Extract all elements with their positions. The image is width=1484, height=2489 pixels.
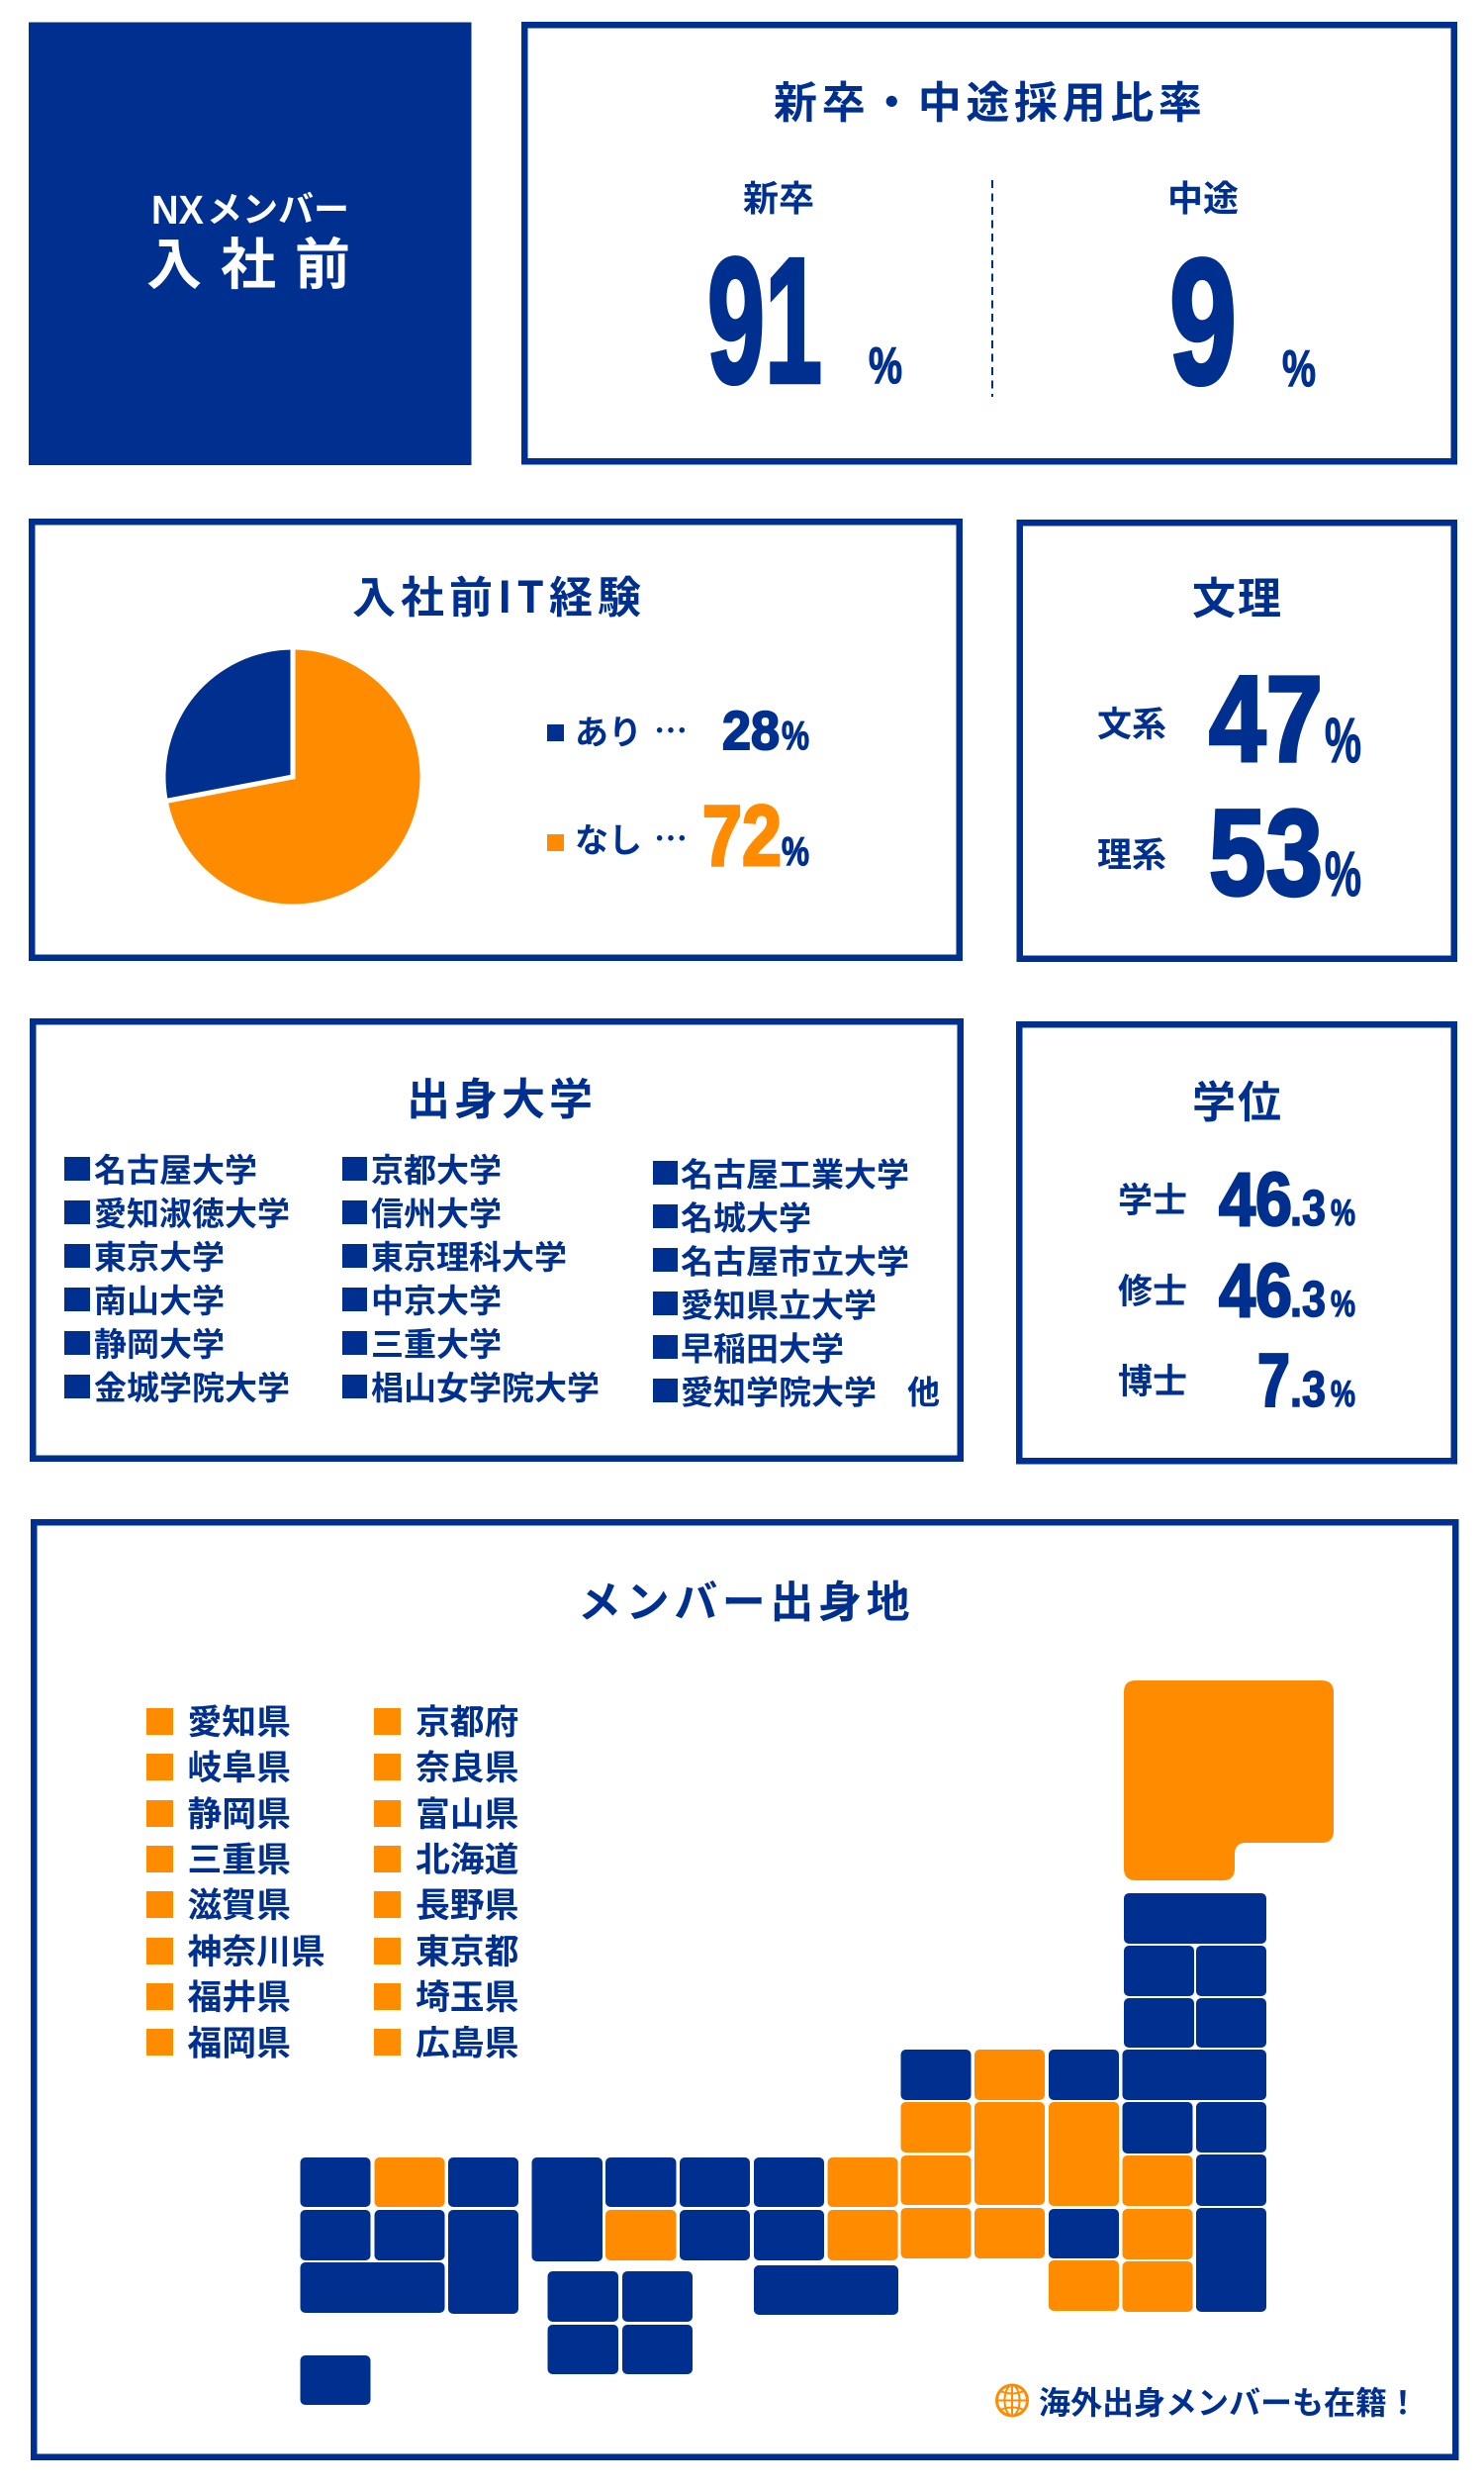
row: sciences 53 percent: 理系 bbox=[1097, 827, 1166, 878]
title: degrees: 学位 bbox=[1192, 1067, 1283, 1130]
legend: yes 28 percent: % bbox=[782, 713, 809, 758]
legend: no 72 percent: % bbox=[782, 828, 809, 874]
list column 3: 名古屋市立大学 bbox=[681, 1235, 909, 1283]
heading: NX members: メンバー bbox=[207, 181, 349, 233]
prefecture list column 2: 北海道 bbox=[416, 1833, 518, 1882]
row: bachelor 46.3 percent: % bbox=[1331, 1193, 1355, 1233]
prefecture list column 1: 岐阜県 bbox=[188, 1741, 291, 1790]
list column 3: 愛知学院大学 bbox=[681, 1366, 877, 1413]
pie chart: 28 percent yes, 72 percent no bbox=[163, 645, 420, 904]
list column 3: 名城大学 bbox=[681, 1192, 811, 1239]
list column 2: 椙山女学院大学 bbox=[371, 1362, 600, 1409]
prefecture list column 1: 神奈川県 bbox=[188, 1925, 325, 1974]
list column 2: 信州大学 bbox=[371, 1188, 502, 1235]
row: doctor 7.3 percent bbox=[1118, 1339, 1355, 1423]
prefecture list column 2: 埼玉県 bbox=[416, 1970, 518, 2020]
list column 1: 金城学院大学 bbox=[94, 1362, 290, 1409]
prefecture list column 2: 東京都 bbox=[416, 1925, 518, 1974]
panel: humanities and sciences bbox=[1020, 523, 1454, 959]
panel: new graduate and mid-career hiring ratio bbox=[524, 25, 1454, 461]
title: hiring ratio: 新卒・中途採用比率 bbox=[774, 67, 1206, 131]
title: IT experience: 入社前IT経験 bbox=[352, 562, 646, 625]
prefecture list column 1: 福井県 bbox=[188, 1970, 291, 2020]
row: bachelor 46.3 percent: 学士 bbox=[1118, 1173, 1187, 1223]
row: master 46.3 percent: 46 bbox=[1219, 1249, 1292, 1333]
prefecture list column 2: 京都府 bbox=[416, 1695, 518, 1745]
list column 3 bbox=[653, 1148, 940, 1413]
row: doctor 7.3 percent: .3 bbox=[1290, 1361, 1326, 1417]
row: sciences 53 percent: 53 bbox=[1209, 786, 1323, 921]
prefecture list column 2 bbox=[374, 1695, 518, 2066]
unit: percent: % bbox=[869, 337, 902, 395]
row: bachelor 46.3 percent: .3 bbox=[1290, 1180, 1326, 1236]
list column 3: 他 bbox=[907, 1366, 940, 1413]
legend: yes 28 percent: … bbox=[654, 705, 688, 753]
list column 1: 東京大学 bbox=[94, 1231, 225, 1279]
row: sciences 53 percent: % bbox=[1325, 838, 1361, 909]
title: humanities and sciences: 文理 bbox=[1192, 563, 1283, 626]
list column 3: 愛知県立大学 bbox=[681, 1279, 877, 1326]
panel: member home regions bbox=[34, 1522, 1455, 2457]
value: 91 percent: 91 bbox=[707, 222, 822, 421]
row: bachelor 46.3 percent bbox=[1118, 1158, 1355, 1242]
legend: no 72 percent: なし bbox=[575, 814, 642, 862]
prefecture list column 1 bbox=[146, 1695, 325, 2066]
panel: degrees bbox=[1019, 1024, 1454, 1461]
legend: yes 28 percent: 28 bbox=[722, 700, 780, 761]
list column 2 bbox=[342, 1144, 600, 1409]
title: member home regions: メンバー出身地 bbox=[578, 1567, 914, 1630]
list column 2: 中京大学 bbox=[371, 1275, 502, 1322]
prefecture list column 1: 滋賀県 bbox=[188, 1878, 291, 1928]
row: doctor 7.3 percent: 7 bbox=[1257, 1339, 1290, 1423]
row: humanities 47 percent: 47 bbox=[1209, 652, 1323, 788]
label: new graduates: 新卒 bbox=[743, 170, 814, 222]
legend: yes 28 percent bbox=[547, 700, 809, 761]
prefecture list column 1: 愛知県 bbox=[188, 1695, 291, 1745]
list column 3: 名古屋工業大学 bbox=[681, 1148, 909, 1196]
row: doctor 7.3 percent: % bbox=[1331, 1374, 1355, 1414]
list column 1: 愛知淑徳大学 bbox=[94, 1188, 290, 1235]
list column 1 bbox=[64, 1144, 290, 1409]
row: master 46.3 percent: .3 bbox=[1290, 1271, 1326, 1327]
prefecture list column 1: 静岡県 bbox=[188, 1787, 291, 1837]
divider bbox=[991, 180, 993, 397]
prefecture list column 2: 奈良県 bbox=[416, 1741, 518, 1790]
list column 2: 三重大学 bbox=[371, 1318, 502, 1366]
row: humanities 47 percent: % bbox=[1325, 705, 1361, 776]
panel: IT experience before joining bbox=[32, 522, 960, 958]
note: overseas members: 海外出身メンバーも在籍！ bbox=[1039, 2378, 1419, 2424]
row: master 46.3 percent: % bbox=[1331, 1284, 1355, 1324]
legend: no 72 percent: 72 bbox=[702, 789, 782, 884]
list column 1: 名古屋大学 bbox=[94, 1144, 257, 1192]
legend: no 72 percent: … bbox=[654, 813, 688, 861]
list column 1: 静岡大学 bbox=[94, 1318, 225, 1366]
heading: NX members: NX bbox=[151, 187, 204, 233]
prefecture list column 2: 広島県 bbox=[416, 2017, 518, 2066]
row: master 46.3 percent: 修士 bbox=[1118, 1264, 1187, 1314]
label: mid-career: 中途 bbox=[1167, 170, 1239, 222]
prefecture list column 2: 長野県 bbox=[416, 1878, 518, 1928]
prefecture list column 1: 三重県 bbox=[188, 1833, 291, 1882]
title: alma maters: 出身大学 bbox=[407, 1064, 597, 1127]
row: bachelor 46.3 percent: 46 bbox=[1219, 1158, 1292, 1242]
list column 2: 京都大学 bbox=[371, 1144, 502, 1192]
icon: globe bbox=[997, 2385, 1027, 2416]
tile map of Japan bbox=[301, 1680, 1334, 2405]
row: sciences 53 percent bbox=[1097, 786, 1361, 921]
panel: heading block NX members before joining bbox=[29, 22, 471, 465]
row: doctor 7.3 percent: 博士 bbox=[1118, 1354, 1187, 1404]
row: humanities 47 percent: 文系 bbox=[1097, 697, 1166, 747]
list column 2: 東京理科大学 bbox=[371, 1231, 567, 1279]
list column 1: 南山大学 bbox=[94, 1275, 225, 1322]
row: master 46.3 percent bbox=[1118, 1249, 1355, 1333]
heading: before joining: 入社前 bbox=[146, 221, 369, 301]
value: 9 percent: 9 bbox=[1169, 223, 1237, 422]
legend: yes 28 percent: あり bbox=[575, 706, 642, 754]
legend: no 72 percent bbox=[547, 789, 809, 884]
list column 3: 早稲田大学 bbox=[681, 1322, 844, 1370]
panel: alma maters bbox=[33, 1021, 961, 1459]
row: humanities 47 percent bbox=[1097, 652, 1361, 788]
prefecture list column 1: 福岡県 bbox=[188, 2017, 291, 2066]
unit: percent: % bbox=[1282, 340, 1316, 398]
prefecture list column 2: 富山県 bbox=[416, 1787, 518, 1837]
